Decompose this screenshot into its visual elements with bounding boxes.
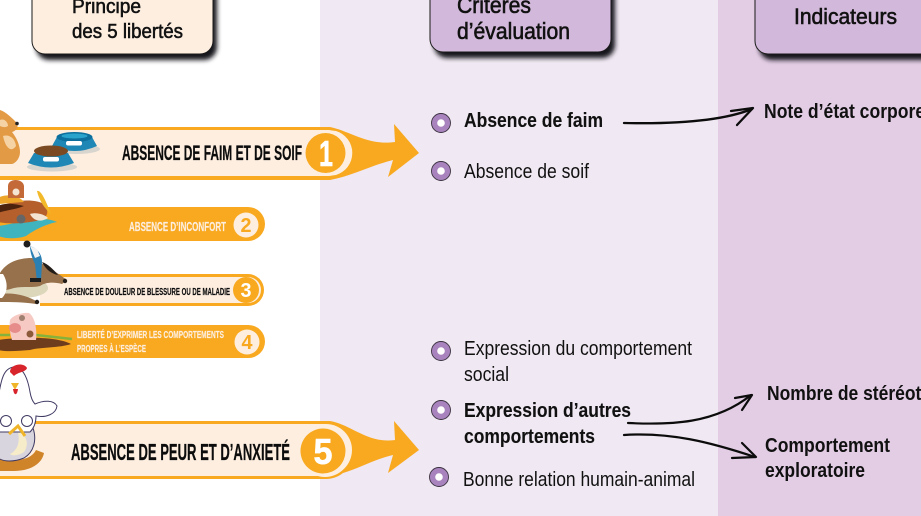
bullet: expression du comportement social: Expression du comportement — [464, 338, 692, 360]
bullet: expression d'autres comportements: comportements — [464, 426, 595, 448]
arrow: expression d'autres comportements to nombre de stéréotypies — [628, 395, 752, 424]
banner 3: absence de douleur de blessure ou de maladie: 3 — [240, 280, 252, 302]
bullet: absence de soif: Absence de soif — [464, 161, 589, 183]
banner 1: absence de faim et de soif: ABSENCE DE FAIM ET DE SOIF — [122, 142, 302, 165]
arrow: absence de faim to note d'état corporel — [624, 108, 753, 125]
banner 4: liberté d'exprimer les comportements propres à l'espèce: LIBERTÉ D’EXPRIMER LES COMPORTEMENTS — [77, 328, 224, 341]
bullet: absence de faim: Absence de faim — [464, 110, 603, 132]
list: critères — [430, 110, 695, 491]
banner 4: liberté d'exprimer les comportements propres à l'espèce — [0, 325, 265, 358]
bullet: expression d'autres comportements: Expression d’autres — [464, 400, 631, 422]
banner 2: absence d'inconfort — [0, 207, 265, 241]
banner 1: absence de faim et de soif — [0, 124, 419, 180]
banner 3: absence de douleur de blessure ou de maladie: ABSENCE DE DOULEUR DE BLESSURE OU DE MALADIE — [64, 287, 230, 298]
panel: indicateurs background — [718, 0, 921, 516]
banner 3: absence de douleur de blessure ou de maladie — [40, 274, 264, 306]
banner 5: absence de peur et d'anxiété: ABSENCE DE PEUR ET D’ANXIETÉ — [71, 438, 290, 465]
bullet: expression du comportement social: social — [464, 364, 509, 386]
banner 2: absence d'inconfort: ABSENCE D’INCONFORT — [129, 220, 226, 234]
banner 4: liberté d'exprimer les comportements propres à l'espèce: PROPRES À L’ESPÈCE — [77, 342, 146, 355]
indicator: comportement exploratoire: Comportement — [765, 435, 890, 457]
panel: critères background — [320, 0, 718, 516]
banner 4: liberté d'exprimer les comportements propres à l'espèce: 4 — [242, 332, 253, 354]
icon: food bowls — [27, 132, 100, 172]
header: indicateurs: Indicateurs — [794, 4, 897, 29]
icon: dog sitting — [0, 110, 20, 164]
header: critères d'évaluation: d’évaluation — [457, 18, 570, 44]
header: indicateurs — [755, 0, 921, 60]
bullet: expression d'autres comportements — [432, 400, 631, 448]
indicator: comportement exploratoire: exploratoire — [765, 460, 865, 482]
banner 2: absence d'inconfort: 2 — [240, 215, 252, 237]
arrow 5 — [320, 421, 419, 479]
arrow: expression d'autres comportements to comportement exploratoire — [624, 434, 756, 458]
banner 5: absence de peur et d'anxiété — [0, 421, 419, 479]
header: principe des 5 libertés — [32, 0, 217, 60]
icon: horse lying and person — [0, 240, 67, 304]
icon: pig in mud — [0, 313, 72, 351]
banner 5: absence de peur et d'anxiété: 5 — [314, 431, 332, 472]
banner 1: absence de faim et de soif: 1 — [319, 133, 333, 174]
icon: chicken on egg — [0, 365, 57, 471]
bullet: bonne relation humain-animal: Bonne relation humain-animal — [463, 469, 695, 491]
header: principe des 5 libertés: des 5 libertés — [72, 21, 183, 43]
bullet: expression du comportement social — [432, 338, 692, 386]
arrow 1 — [320, 124, 419, 180]
icon: pets on a cushion — [0, 180, 57, 238]
header: critères d'évaluation — [430, 0, 615, 58]
